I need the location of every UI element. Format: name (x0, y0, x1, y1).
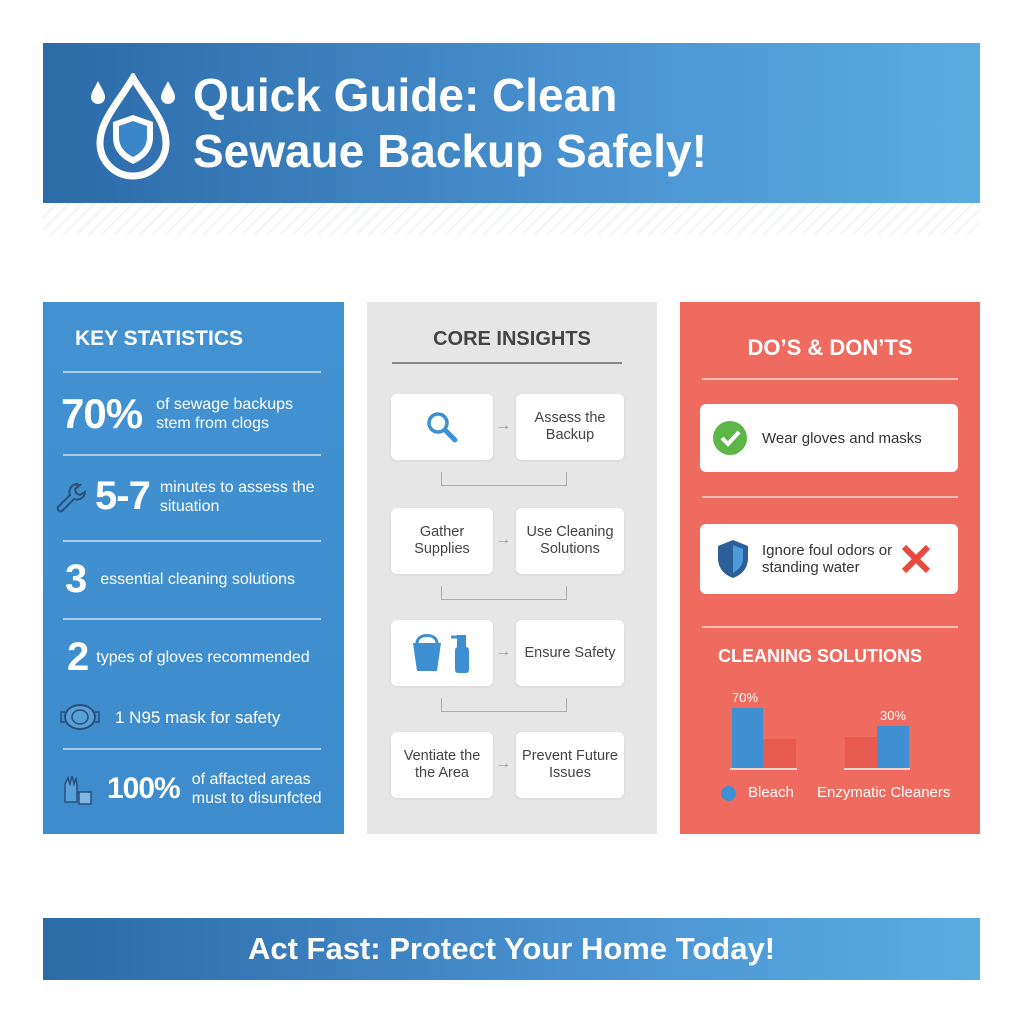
step row 3 (391, 620, 493, 686)
stat 3: essential cleaning solutions (100, 571, 295, 588)
heading: DO’S & DON’TS (747, 335, 912, 360)
stat 100% with gloves (64, 771, 322, 807)
panel: core insights: Backup (546, 427, 594, 443)
stat 5-7 with wrench (56, 474, 315, 518)
icon: water drop shield (91, 73, 175, 180)
stat 100% with gloves: of affacted areas (192, 771, 311, 788)
do card: Wear gloves and masks (762, 430, 922, 446)
step row 4: Ventiate the (404, 748, 480, 764)
step row 2 (391, 508, 493, 574)
step row 2: Supplies (414, 541, 470, 557)
stat 5-7 with wrench: minutes to assess the (160, 478, 315, 496)
stat 2: types of gloves recommended (96, 649, 310, 666)
step row 1 (391, 394, 493, 460)
stat 2: 2 (67, 635, 88, 679)
chart: cleaning solutions: 30% (880, 708, 906, 723)
stat 3 (65, 557, 295, 601)
panel: core insights: Prevent Future (522, 748, 618, 764)
stat 70%: 70% (61, 390, 142, 437)
stat N95: 1 N95 mask for safety (115, 708, 280, 726)
step row 4 (391, 732, 493, 798)
chart: cleaning solutions: Enzymatic Cleaners (817, 784, 950, 801)
panel: core insights: → (495, 643, 511, 660)
stat 70% (61, 390, 293, 437)
panel: core insights: → (495, 755, 511, 772)
panel: do's and don'ts (680, 302, 980, 834)
footer banner: Act Fast: Protect Your Home Today! (248, 931, 775, 966)
stat 5-7 with wrench: situation (160, 498, 219, 514)
panel: core insights: Ensure Safety (524, 644, 616, 660)
stat 2 (67, 635, 310, 679)
stat 70%: stem from clogs (156, 415, 269, 432)
title: Quick Guide: Clean (193, 69, 617, 121)
panel: core insights: → (495, 417, 511, 434)
panel: key statistics (43, 302, 344, 834)
step row 4: the Area (415, 765, 469, 781)
don't card (700, 524, 958, 594)
step row 2: Gather (420, 524, 464, 540)
stat 100% with gloves: 100% (107, 772, 180, 805)
panel: core insights: Issues (549, 765, 591, 781)
chart: cleaning solutions: Bleach (748, 784, 794, 801)
panel: core insights: Assess the (535, 410, 605, 426)
title (193, 69, 707, 177)
stat N95 (60, 704, 280, 730)
don't card: standing water (762, 559, 860, 576)
don't card: Ignore foul odors or (762, 542, 892, 559)
stat 5-7 with wrench: 5-7 (95, 474, 150, 518)
chart: cleaning solutions (718, 646, 950, 801)
chart: cleaning solutions: 70% (732, 690, 758, 705)
chart: cleaning solutions: CLEANING SOLUTIONS (718, 646, 922, 666)
stat 3: 3 (65, 557, 86, 601)
stat 100% with gloves: must to disunfcted (192, 790, 322, 807)
do card (700, 404, 958, 472)
header banner (43, 43, 980, 203)
panel: core insights: Solutions (540, 541, 600, 557)
panel: core insights: → (495, 531, 511, 548)
panel: core insights (367, 302, 657, 834)
title: Sewaue Backup Safely! (193, 125, 707, 177)
heading: KEY STATISTICS (75, 327, 243, 350)
panel: core insights: Use Cleaning (526, 524, 614, 540)
footer banner (43, 918, 980, 980)
stat 70%: of sewage backups (156, 396, 293, 413)
heading: CORE INSIGHTS (433, 328, 591, 350)
